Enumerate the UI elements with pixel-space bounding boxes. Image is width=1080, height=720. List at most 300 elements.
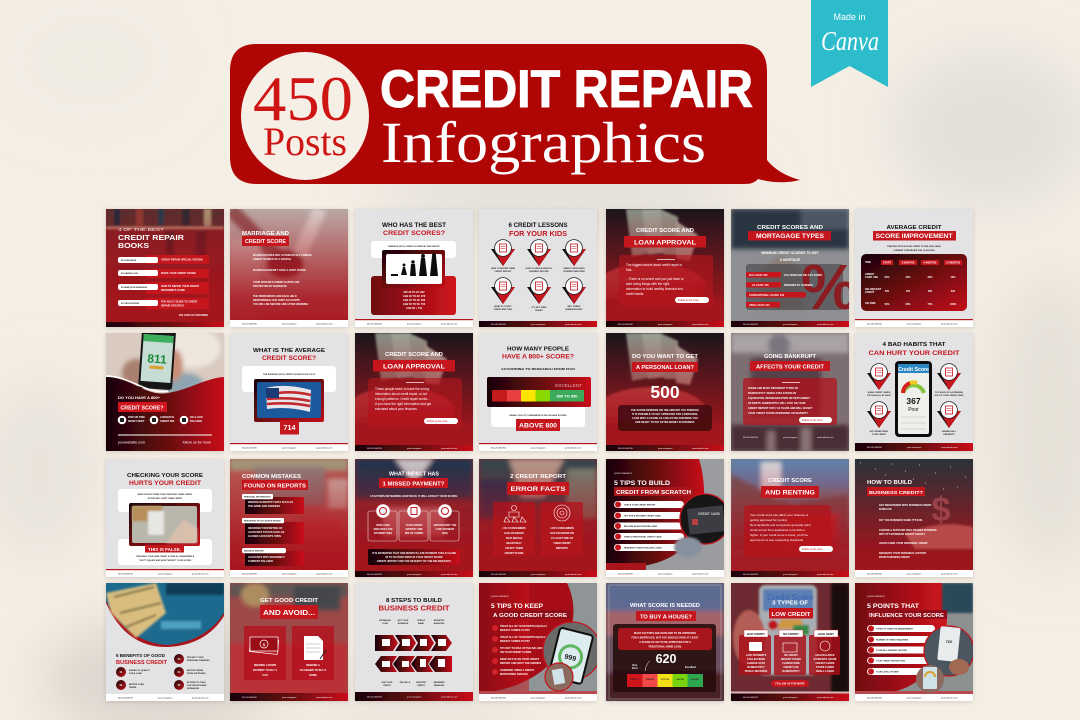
tip list: ON YOUR CREDIT CARDS: [500, 651, 532, 654]
footer: [355, 571, 473, 577]
card: how to build business credit: [855, 459, 973, 577]
post thumbnail grid: [106, 209, 974, 701]
factor captions: HOW LONG: [376, 524, 390, 527]
subheading: Infographics: [381, 110, 706, 175]
card: credit score and loan approval 2: [355, 333, 473, 451]
card: 4 bad habits: [855, 333, 973, 451]
text panel: Follow us for more: [802, 419, 823, 422]
footer: your.instagram: [531, 323, 546, 326]
card: 8 steps to build business credit: [355, 583, 473, 701]
benefit list: 02: [120, 684, 123, 687]
type columns: CREDIT CARDS: [816, 662, 835, 665]
card: personal loan 500: [606, 333, 724, 451]
habit captions: USING CREDIT CARDS: [868, 391, 891, 394]
footer: 010-20-304760: [118, 574, 134, 576]
heading: [373, 352, 455, 372]
heading: QUICK INSIGHTS: [491, 596, 509, 598]
footer: 010-20-304760: [867, 698, 883, 700]
heading: CREDIT SCORE AND: [385, 352, 443, 358]
step list: FROM BUSINESS CREDIT: [879, 556, 910, 559]
lesson pins: [491, 240, 586, 304]
footer: your.instagram: [783, 573, 798, 576]
lesson captions: [491, 267, 585, 312]
type columns: CHARGE OFFS: [747, 662, 765, 665]
text panel: Rent landlords and companies generally want: [750, 523, 811, 527]
footer: yourwebsite.com: [316, 572, 333, 576]
text panel: CREDIT REPORT FOR 7-10 YEARS AND WILL AFFECT: [748, 407, 813, 410]
table intro: [887, 245, 941, 252]
post count badge: [241, 52, 369, 180]
heading: [502, 346, 574, 360]
mistake blocks: THE NAME AND ADDRESS: [248, 505, 280, 508]
footer: yourwebsite.com: [565, 323, 582, 326]
mistake blocks: PERSONAL INFORMATION: [244, 496, 271, 498]
footer: [479, 694, 597, 701]
score panel: FOR A MORTGAGE, BUT YOU SHOULD HAVE AT LEAST: [632, 636, 699, 640]
footer: your.instagram: [407, 696, 422, 698]
type columns: BANKRUPTCY: [782, 670, 800, 673]
heading: AND RENTING: [765, 490, 815, 496]
option panels: CAR: [262, 674, 268, 677]
heading: GOING BANKRUPT: [764, 354, 817, 360]
option panels: HOME: [309, 674, 317, 677]
holding hands photo: [230, 209, 348, 329]
footer: your.instagram: [658, 447, 673, 450]
top step captions: OPEN A: [417, 619, 425, 622]
footer: your.instagram: [407, 322, 422, 326]
type columns: RECENT YOUNG: [781, 658, 801, 661]
footer: [855, 319, 973, 327]
top step captions: AGENCIES: [434, 622, 445, 625]
laptop photo: [230, 459, 348, 577]
fact panels: 1 IN 4 CONSUMERS: [502, 527, 526, 530]
callout: CREDIT HISTORY AND THE SEVERITY OF THE DELINQUENCY: [377, 560, 452, 563]
bottom step captions: CREDIT: [383, 685, 392, 687]
tip list: WHEN IT COMES TO PAY: [500, 640, 530, 643]
heading: HOW MANY PEOPLE: [507, 346, 569, 352]
dusk photo: [606, 583, 724, 701]
score panel: [371, 276, 456, 315]
post count badge: 450: [253, 64, 353, 134]
card: credit scores and mortgage types: [731, 209, 858, 327]
heading: [632, 354, 699, 372]
bottom step captions: FINANCES: [434, 684, 445, 687]
benefit list: BETTER TERMS: [187, 670, 204, 672]
bookshelf photo: [106, 209, 224, 327]
footer: your.instagram: [907, 446, 922, 449]
heading: A PERSONAL LOAN?: [636, 365, 694, 371]
step list: AVOID USING YOUR PERSONAL CREDIT: [879, 542, 928, 545]
table intro: CURRENT STRATEGIES FOR 12 MONTHS: [893, 249, 935, 252]
heading: [118, 227, 184, 250]
footer: yourwebsite.com: [316, 446, 333, 450]
bullet list: PROTECTED BY MARRIAGE: [253, 285, 287, 288]
heading: WHAT IMPACT HAS: [389, 472, 440, 478]
loan list: USDA LOAN: 640: [749, 304, 770, 307]
heading: GET GOOD CREDIT: [260, 598, 319, 604]
fact panels: HAD AN ERROR: [504, 532, 524, 535]
heading: LOW CREDIT: [772, 612, 811, 618]
heading: CREDIT SCORE AND: [636, 228, 694, 234]
phone gauge: Credit Score: [898, 367, 929, 373]
score panel: Excellent: [685, 666, 696, 669]
lesson captions: HOW TO KEEP A HEALTHY: [526, 267, 553, 270]
score panel: AGE 60 + 744: [406, 307, 423, 310]
footer: [230, 570, 348, 577]
card: 5 tips to keep a good credit score: [479, 583, 597, 701]
point pills: YOUR LEVEL OF DEBT: [876, 672, 900, 674]
bullet list: MARRIAGE DOESN'T HAVE A JOINT SCORE: [253, 269, 306, 272]
text panel: approved in a way respecting standards.: [750, 538, 804, 542]
footer: 010-20-304760: [491, 698, 507, 700]
bullet list: YOUR SPOUSE'S CREDIT HABITS ARE: [253, 281, 300, 284]
tip list: TREAT ALL OF YOUR DEBTS EQUALLY: [500, 636, 548, 639]
heading: 3 TYPES OF: [772, 600, 809, 606]
bottom step captions: PAY BILLS: [400, 681, 411, 684]
footer: 010-20-304760: [367, 324, 383, 326]
benefit list: FROM SUPPLIERS: [187, 673, 206, 675]
intro line: 3 FACTORS DETERMINE HOW MUCH IT WILL AFFECT YOUR SCORE:: [370, 494, 458, 498]
habit captions: 50% OF YOUR CREDIT CARD: [934, 394, 964, 397]
heading: FOR YOUR KIDS: [509, 231, 567, 238]
score bar: 580-669: [646, 679, 655, 681]
desk photo: [230, 583, 348, 701]
type columns: CREDIT USE: [783, 666, 799, 669]
heading: 5 BENEFITS OF GOOD: [116, 653, 166, 658]
type columns: STORE CARDS: [816, 666, 834, 669]
tip pills: CHECK YOUR CREDIT REPORT: [624, 504, 656, 506]
mistake blocks: CURRENT BALANCE: [248, 560, 273, 563]
heading: QUICK INSIGHTS: [614, 473, 632, 475]
text panel: information about credit repair, or not: [375, 392, 427, 396]
step list: WITH IT'S BUSINESS CREDIT AGENCY: [879, 533, 926, 536]
footer: [606, 570, 724, 577]
lesson captions: INTEREST AND FEES: [563, 270, 585, 273]
phone photo: 811: [147, 351, 168, 367]
book list: FOLLOW US FOR MORE: [179, 314, 208, 317]
title speech bubble: [230, 44, 800, 184]
score panel: AGE 40 TO 49: 686: [403, 299, 426, 302]
point pills: YOUR CREDIT HISTORY AGE: [876, 660, 906, 662]
follow pill: FOLLOW US FOR MORE: [775, 682, 805, 686]
score bar: 670-739: [661, 679, 670, 681]
score tag: 714: [284, 423, 296, 432]
score panel: Poor: [632, 667, 638, 670]
footer: 010-20-304760: [743, 324, 759, 326]
improvement table: 50%: [884, 303, 890, 306]
footer: your.instagram: [783, 323, 798, 326]
house photo: %: [801, 251, 858, 323]
card: credit score and renting: [731, 459, 849, 577]
footer: 010-20-304760: [242, 697, 258, 699]
footer: 010-20-304760: [491, 448, 507, 450]
money photo: [596, 333, 724, 451]
text panel: Follow us for more: [678, 299, 699, 302]
score bar: [487, 377, 591, 407]
book list: THE ADULT GUIDE TO CREDIT: [161, 300, 198, 304]
text panel: [743, 378, 837, 425]
text panel: The biggest secret about credit repair is: [626, 263, 682, 267]
heading: [748, 225, 831, 240]
bullet list: YOU WILL BE BEFORE AND AFTER WEDDING: [253, 303, 308, 306]
heading: BOOKS: [118, 243, 149, 250]
heading: BUSINESS CREDIT: [116, 660, 168, 666]
heading: [630, 603, 700, 621]
card: going bankrupt: [731, 333, 849, 451]
card: average credit score improvement: [855, 209, 973, 327]
improvement table: ON-TIME: [865, 302, 876, 305]
footer: 010-20-304760: [491, 324, 507, 326]
lesson captions: CREDIT AND THEY: [494, 308, 513, 311]
credit card photo: CREDIT CARD: [698, 512, 721, 516]
factor boxes: [368, 511, 459, 541]
red swoosh: [606, 459, 704, 570]
fact panels: 1 IN 5 CONSUMERS: [550, 527, 574, 530]
factor captions: AND HOW LATE: [373, 528, 393, 531]
footer: yourwebsite.com: [316, 322, 333, 326]
heading: LOAN APPROVAL: [634, 240, 696, 246]
benefit list: [116, 654, 210, 690]
book list: HOW TO REPAIR YOUR CREDIT: [161, 285, 200, 288]
improvement table: [861, 254, 967, 311]
fact panels: AFFECT THEIR: [505, 547, 523, 550]
improvement table: 40%: [905, 276, 911, 279]
text panel: IT IS POSSIBLE TO GET APPROVED FOR A PERSONAL: [632, 413, 699, 416]
footer: yourwebsite.com: [817, 436, 834, 439]
loan list: CONVENTIONAL LOANS: 620: [749, 294, 785, 297]
improvement table: 100%: [950, 303, 957, 306]
subtitle panel: AVERAGE (FICO) CREDIT SCORES BY AGE GROUP: [388, 245, 440, 248]
heading: BUSINESS CREDIT: [378, 606, 450, 612]
phone gauge: Poor: [908, 407, 919, 413]
mistake blocks: [242, 494, 304, 566]
heading: CREDIT FROM SCRATCH: [616, 490, 691, 496]
card: what score to buy a house: [606, 583, 724, 701]
book list: BY SETH BUSTER: [121, 303, 140, 305]
fact panels: [493, 502, 583, 556]
footer: 010-20-304760: [743, 437, 759, 439]
heading: [873, 225, 956, 240]
tip list: REPORT AND SPOT THE ERRORS: [500, 662, 541, 665]
card: what is the average credit score: [230, 333, 348, 451]
improvement table: 500: [885, 290, 890, 293]
heading: [867, 480, 925, 496]
book list: REPAIR STRATEGY: [161, 304, 185, 308]
phone circle photos: 760: [946, 639, 953, 644]
heading: WHAT IS THE AVERAGE: [253, 348, 325, 354]
fact panels: THEIR CREDIT: [553, 542, 571, 545]
footer: 010-20-304760: [242, 324, 258, 326]
type columns: CAREER WISE: [782, 662, 800, 665]
loan list: VA LOAN: 500: [752, 284, 769, 287]
card: 2 credit report error facts: [479, 459, 597, 577]
text panel: start doing things with the right: [626, 282, 669, 286]
red swoosh: [855, 583, 973, 694]
footer: [731, 571, 849, 577]
type columns: STUDENTS LOANS: [814, 658, 837, 661]
text panel: [618, 405, 712, 431]
heading: HOW TO BUILD: [867, 480, 912, 486]
point pills: YOUR BILL PAYMENT HISTORY: [876, 649, 908, 652]
heading: CREDIT SCORES AND: [757, 225, 823, 231]
score panel: 620: [656, 652, 676, 666]
heading: HURTS YOUR CREDIT: [129, 480, 201, 487]
footer: [855, 694, 973, 701]
result panel: NEARLY 20% OF CONSUMERS IN THE US HAVE SCORES: [509, 414, 567, 417]
loan list: [746, 272, 822, 308]
habit captions: TOO MUCH OF A SPENDING: [935, 391, 963, 394]
big number: 500: [650, 382, 680, 402]
text panel: If you have the right information and get: [375, 402, 431, 406]
step list: CHOOSE A SUPPLIER WHO TRADES BUSINESS: [879, 529, 937, 532]
step list: SEPARATE YOUR PERSONAL HISTORY: [879, 552, 927, 555]
lesson captions: CREDIT CARDS WITH: [563, 267, 585, 270]
heading: [491, 596, 571, 619]
footer: your.instagram: [783, 436, 798, 439]
footer: yourwebsite.com: [441, 573, 458, 576]
improvement table: 540: [906, 290, 911, 293]
footer: your.instagram: [907, 572, 922, 576]
house photo: [731, 459, 849, 577]
card: get good credit and avoid: [230, 583, 348, 701]
point pills: NUMBER OF CREDIT INQUIRIES: [876, 640, 909, 642]
text panel: enough patience. Credit repair works...: [375, 397, 430, 401]
tip list: KEEP AN EYE ON YOUR CREDIT: [500, 658, 539, 661]
heading: HAVE A 800+ SCORE?: [502, 354, 574, 360]
tip pills: RESEARCH CREDIT BUILDER LOANS: [624, 546, 662, 550]
heading: ERROR FACTS: [510, 486, 566, 493]
footer: your.instagram: [158, 696, 173, 700]
footer: 010-20-304760: [867, 574, 883, 576]
heading: [118, 396, 167, 412]
heading: [260, 598, 319, 619]
type columns: LATE PAYMENTS: [746, 654, 767, 657]
text panel: ...There is no secret and you just have to: [626, 277, 684, 281]
heading: A GOOD CREDIT SCORE: [493, 613, 568, 619]
benefit list: TERMS: [129, 687, 137, 689]
mistake blocks: ERRORS IN IDENTITY DATA SUCH AS: [248, 501, 293, 504]
wave panel: [106, 376, 224, 451]
card: 5 tips to build credit: [606, 459, 724, 577]
footer: [855, 570, 973, 577]
card: credit score and loan approval: [606, 209, 724, 327]
heading: MARRIAGE AND: [242, 231, 289, 237]
bottom step captions: CREDIT: [417, 685, 426, 687]
lesson captions: BUREAUS EXIST: [566, 308, 583, 311]
habit captions: OR CASH ALL AT ONCE: [867, 394, 892, 397]
callout: [368, 549, 460, 565]
text panel: Follow us for more: [802, 548, 823, 551]
step list: [879, 504, 937, 559]
footer: [731, 321, 849, 327]
tip list: TREAT ALL OF YOUR DEBTS EQUALLY: [500, 625, 548, 628]
card shadows: [106, 210, 973, 702]
heading: [242, 231, 289, 246]
money photo: [596, 209, 724, 327]
footer: yourwebsite.com: [941, 322, 958, 326]
heading: [614, 473, 694, 496]
footer: [106, 569, 224, 577]
footer: 010-20-304760: [618, 574, 634, 576]
footer: [355, 319, 473, 327]
text panel: credit scores from applicants to be 600 or: [750, 528, 805, 532]
footer: [230, 693, 348, 701]
score panel: Very: [632, 664, 638, 667]
habit captions: NOT MONITORING: [870, 431, 889, 433]
footer: 010-20-304760: [367, 574, 383, 576]
factor captions: [373, 524, 457, 535]
heading: COMMON MISTAKES: [242, 474, 301, 480]
footer: [606, 445, 724, 451]
top step captions: GET YOUR: [398, 620, 409, 622]
score bar: 300-579: [631, 679, 639, 681]
footer: [606, 321, 724, 327]
footer: yourwebsite.com: [692, 572, 709, 576]
score panel: AGE 30 TO 39: 678: [403, 295, 426, 298]
heading: [253, 348, 325, 362]
bullet list: [253, 254, 312, 306]
heading: 6 CREDIT LESSONS: [508, 223, 568, 229]
text panel: Follow us for more: [427, 420, 448, 423]
heading: CREDIT SCORE?: [262, 355, 316, 362]
fact panels: CREDIT SCORE: [505, 552, 524, 555]
callout: IT IS ESTIMATED THAT ONE MONTH'S LATE PAYMENT COULD CAUSE: [372, 552, 456, 555]
benefit list: EXPANSION: [187, 687, 200, 690]
footer: yourwebsite.com: [441, 447, 458, 450]
phone photo: Credit Score: [767, 592, 813, 602]
footer: your.instagram: [783, 696, 798, 699]
heading: [508, 223, 568, 238]
lesson captions: PAYMENT RECORD: [529, 270, 549, 273]
source line: ACCORDING TO RESEARCH FROM FICO: [501, 367, 576, 371]
card: common mistakes on reports: [230, 459, 348, 577]
three icons: [118, 416, 203, 424]
bottom step captions: MONITOR: [416, 682, 426, 684]
heading: AND AVOID...: [263, 610, 315, 617]
score panel: [613, 624, 716, 692]
footer: [479, 443, 597, 451]
heading: 4 OF THE BEST: [118, 227, 164, 233]
factor captions: PAYMENT WAS: [374, 532, 392, 535]
option panels: PAYMENT TO BUY A: [253, 669, 277, 672]
bottom step captions: [382, 681, 445, 687]
footer: yourwebsite.com: [941, 446, 958, 449]
footer: your.instagram: [158, 572, 173, 576]
heading: [761, 478, 819, 498]
score bar: EXCELLENT: [555, 383, 582, 388]
footer: your.instagram: [282, 322, 297, 326]
book list: BY KAREN LOVE: [121, 272, 139, 275]
text panel: YOUR CREDIT SCORE DEPENDING ON SEVERITY.: [748, 412, 809, 415]
footer: your.instagram: [658, 572, 673, 576]
option panels: NEEDING A: [306, 664, 320, 667]
fact panels: THAT WOULD: [506, 537, 522, 540]
improvement table: TIME: [865, 261, 871, 264]
phone gauge: 367: [906, 396, 921, 406]
book list: BY MARQUITA ROBINSON: [121, 286, 148, 289]
phone photo: 999: [564, 653, 577, 663]
factor captions: MIX OF CARDS: [405, 532, 423, 535]
white panels: CHECKING YOUR OWN CREDIT SCORE IS CONSIDERED A: [136, 555, 195, 558]
footer: yourwebsite.com: [817, 323, 834, 326]
starry photo: $: [932, 491, 951, 529]
false tag: THIS IS FALSE.: [148, 547, 181, 552]
footer: your.instagram: [531, 573, 546, 576]
three icons: DO A LOW: [190, 416, 203, 419]
improvement table: 30%: [927, 276, 933, 279]
generations image: [382, 250, 445, 288]
tip pills: [614, 501, 684, 551]
